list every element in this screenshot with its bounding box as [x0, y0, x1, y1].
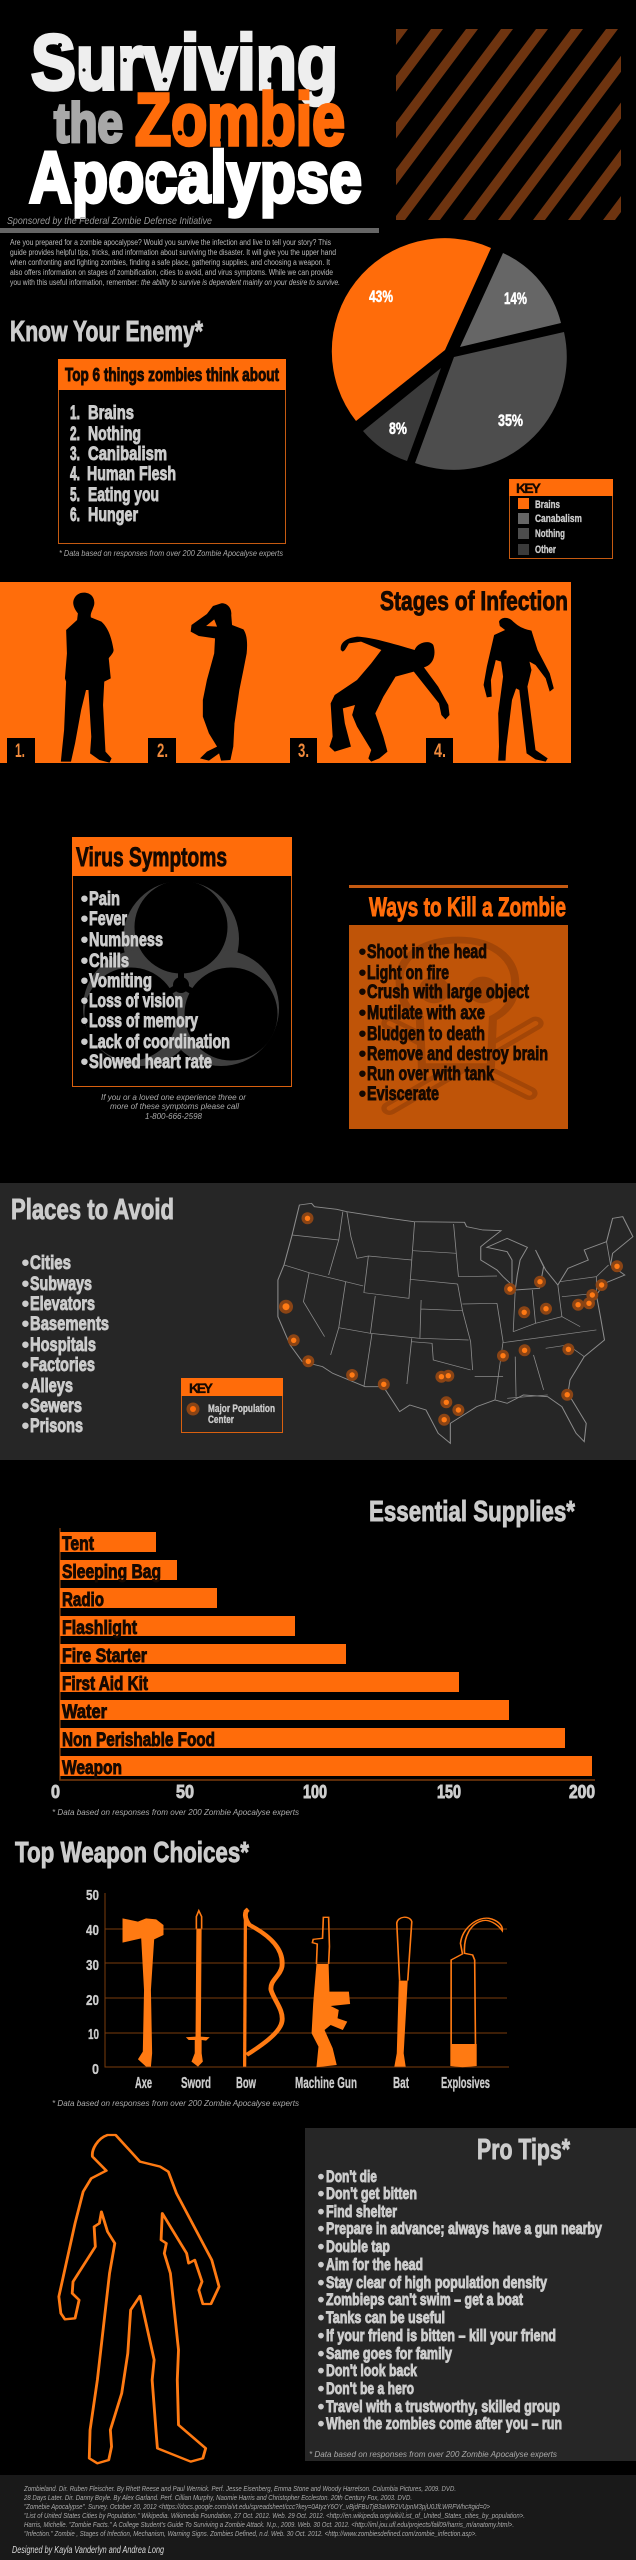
- chart: top weapon choices: 10: [88, 2026, 99, 2043]
- tips list: •: [318, 2237, 324, 2256]
- symptoms call-out note: If you or a loved one experience three or: [101, 1093, 246, 1102]
- map key: Center: [208, 1414, 235, 1426]
- ways list: [359, 941, 548, 1105]
- panel: top 6 things: Human Flesh: [87, 463, 176, 485]
- tips list: Aim for the head: [326, 2255, 423, 2274]
- symptoms list: •: [81, 1010, 88, 1032]
- title: the: [54, 91, 123, 154]
- panel: top 6 things: 5.: [70, 484, 80, 506]
- map key: Major Population: [208, 1403, 275, 1415]
- bar chart: essential supplies: Weapon: [62, 1758, 122, 1779]
- panel: top 6 things: Hunger: [88, 504, 138, 526]
- tips list: •: [318, 2167, 324, 2186]
- ways list: Crush with large object: [367, 981, 529, 1003]
- chart: top weapon choices: Bow: [236, 2075, 256, 2092]
- chart: top weapon choices: Machine Gun: [295, 2075, 357, 2092]
- symptoms list: Vomiting: [89, 970, 152, 992]
- places list: •: [22, 1395, 29, 1417]
- panel: top 6 things: 3.: [70, 443, 80, 465]
- intro text: [9, 238, 340, 287]
- intro text: Are you prepared for a zombie apocalypse? Would you survive the infection and live to tell your story? This: [10, 238, 331, 247]
- footer: references and credits: "Infection." Zombie , Stages of Infection, Mechanism, Warning Signs. Zombies Defined, n.d. Web. 30 Oct. 2012. <http://www.zombiesdefined.com/zombie_infection.asp>.: [24, 2531, 477, 2538]
- ways list: •: [359, 1043, 366, 1065]
- panel: places to avoid: [0, 1183, 636, 1460]
- symptoms list: Slowed heart rate: [89, 1051, 212, 1073]
- symptoms call-out note: more of these symptoms please call: [110, 1102, 239, 1111]
- map key: KEY: [189, 1380, 214, 1396]
- pie key: [509, 479, 613, 558]
- bar chart: essential supplies: 200: [569, 1782, 595, 1802]
- tips list: •: [318, 2326, 324, 2345]
- ways list: •: [359, 962, 366, 984]
- tips list: •: [318, 2184, 324, 2203]
- ways list: •: [359, 1023, 366, 1045]
- pie chart: 35%: [498, 411, 523, 430]
- symptoms list: •: [81, 929, 88, 951]
- bar chart: essential supplies: Tent: [62, 1534, 95, 1555]
- footer: references and credits: "List of United States Cities by Population." Wikipedia. Wikimedia Foundation, 27 Oct. 2012. Web. 29 Oct. 2012. <http://en.wikipedia.org/wiki/List_of_United_States_cities_by_population>.: [24, 2513, 525, 2520]
- heading: places to avoid: Places to Avoid: [11, 1194, 174, 1226]
- grunge specks on title: [58, 43, 348, 193]
- population centre markers: [279, 1212, 623, 1426]
- footer: references and credits: Designed by Kayla Vanderlyn and Andrea Long: [12, 2545, 164, 2556]
- symptoms list: Loss of memory: [89, 1010, 198, 1032]
- stage number 2: [148, 738, 176, 763]
- heading: essential supplies: Essential Supplies*: [369, 1496, 576, 1528]
- symptoms list: Chills: [89, 950, 129, 972]
- bar chart: essential supplies: 100: [303, 1782, 327, 1802]
- chart: top weapon choices: Axe: [135, 2075, 152, 2092]
- tips list: •: [318, 2397, 324, 2416]
- bar chart: essential supplies: 150: [437, 1782, 461, 1802]
- pie chart: 8%: [389, 419, 407, 438]
- panel: top 6 things: 1.: [70, 402, 80, 424]
- heading: pro tips: Pro Tips*: [477, 2134, 571, 2166]
- places list: Sewers: [30, 1395, 82, 1417]
- sponsor line: Sponsored by the Federal Zombie Defense Initiative: [7, 215, 212, 227]
- footnote: * Data based on responses from over 200 Zombie Apocalyse experts: [52, 1808, 299, 1817]
- stage number 3: 3.: [298, 741, 309, 762]
- symptoms list: •: [81, 970, 88, 992]
- panel: virus symptoms: Virus Symptoms: [76, 842, 227, 872]
- tips list: Double tap: [326, 2237, 390, 2256]
- intro text: when confronting and fighting zombies, finding a safe place, gathering supplies, and choosing a weapon. It: [9, 258, 331, 267]
- population centre marker cores: [282, 1216, 620, 1422]
- symptoms call-out note: [101, 1093, 246, 1121]
- footer: references and credits: Zombieland. Dir. Ruben Fleischer. By Rhett Reese and Paul Wernick. Perf. Jesse Eisenberg, Emma Stone and Woody Harrelson. Columbia Pictures, 2009. DVD.: [23, 2486, 456, 2493]
- tips list: •: [318, 2308, 324, 2327]
- tips list: •: [318, 2361, 324, 2380]
- zombie outline figure: [59, 2135, 219, 2463]
- pie chart: 43%: [369, 287, 393, 306]
- pie key: Other: [535, 544, 557, 556]
- tips list: •: [318, 2379, 324, 2398]
- bar chart: essential supplies: [51, 1528, 595, 1802]
- panel: virus symptoms: [72, 837, 292, 1086]
- tips list: •: [318, 2414, 324, 2433]
- tips list: •: [318, 2273, 324, 2292]
- tips list: Tanks can be useful: [326, 2308, 445, 2327]
- map key: [181, 1378, 283, 1432]
- panel: top 6 things: Brains: [88, 402, 134, 424]
- stage number 4: 4.: [434, 741, 446, 762]
- weapon icons: [123, 1909, 502, 2067]
- ways list: Remove and destroy brain: [367, 1043, 548, 1065]
- ways list: Eviscerate: [367, 1083, 439, 1105]
- tips list: Don't get bitten: [326, 2184, 417, 2203]
- chart: top weapon choices: 0: [92, 2061, 99, 2078]
- ways list: •: [359, 941, 366, 963]
- stage number 4: [426, 738, 453, 763]
- stage number 2: 2.: [157, 741, 168, 762]
- tips list: [318, 2167, 602, 2433]
- symptoms list: •: [81, 908, 88, 930]
- places list: Cities: [30, 1252, 71, 1274]
- places list: Factories: [30, 1354, 95, 1376]
- bar chart: essential supplies: Non Perishable Food: [62, 1730, 215, 1751]
- places list: •: [22, 1273, 29, 1295]
- chart: top weapon choices: 50: [86, 1887, 99, 1904]
- places list: Elevators: [30, 1293, 95, 1315]
- places list: Subways: [30, 1273, 92, 1295]
- places list: •: [22, 1313, 29, 1335]
- ways list: Bludgen to death: [367, 1023, 485, 1045]
- tips list: If your friend is bitten – kill your friend: [326, 2326, 556, 2345]
- symptoms list: Lack of coordination: [89, 1031, 230, 1053]
- symptoms list: [81, 888, 230, 1073]
- ways list: Shoot in the head: [367, 941, 487, 963]
- places list: [22, 1252, 109, 1437]
- places list: •: [22, 1415, 29, 1437]
- symptoms list: Pain: [89, 888, 120, 910]
- places list: •: [22, 1375, 29, 1397]
- places list: Prisons: [30, 1415, 83, 1437]
- panel: top 6 things: Nothing: [88, 423, 141, 445]
- pie key: Brains: [535, 499, 560, 511]
- ways list: Run over with tank: [367, 1063, 494, 1085]
- bar chart: essential supplies: First Aid Kit: [62, 1674, 149, 1695]
- symptoms list: •: [81, 1031, 88, 1053]
- pie key: Nothing: [535, 528, 565, 540]
- ways list: Mutilate with axe: [367, 1002, 485, 1024]
- stage number 1: 1.: [15, 741, 25, 762]
- ways list: •: [359, 1083, 366, 1105]
- tips list: Don't be a hero: [326, 2379, 414, 2398]
- title: [29, 18, 362, 218]
- places list: •: [22, 1354, 29, 1376]
- tips list: •: [318, 2219, 324, 2238]
- symptoms list: •: [81, 1051, 88, 1073]
- footer: references and credits: [0, 2475, 636, 2560]
- icon: skull and crossbones: [389, 940, 536, 1108]
- hazard stripes: [396, 29, 621, 220]
- panel: top 6 things: Eating you: [88, 484, 159, 506]
- footer: references and credits: "Zomebie Apocalypse". Survey. October 20, 2012 <https://docs.google.com/a/vt.edu/spreadsheet/ccc?key=0AtyzY6OY_vBjdFBuTjB3aWR2VUpnM3pjU0JfLWRFWhc#gid=0>: [24, 2504, 490, 2511]
- chart: top weapon choices: Bat: [393, 2075, 409, 2092]
- bar chart: essential supplies: Flashlight: [62, 1618, 138, 1639]
- tips list: Same goes for family: [326, 2344, 452, 2363]
- panel: pro tips: [305, 2128, 636, 2461]
- symptoms list: •: [81, 990, 88, 1012]
- US map: [278, 1203, 633, 1443]
- intro text: also offers information on stages of zombification, cities to avoid, and virus symptoms. While we can provide: [10, 268, 333, 277]
- bar chart: essential supplies: 0: [51, 1782, 60, 1802]
- pie chart: 14%: [504, 289, 527, 308]
- tips list: Don't look back: [326, 2361, 417, 2380]
- ways list: •: [359, 1063, 366, 1085]
- places list: •: [22, 1252, 29, 1274]
- silhouettes of the four stages: [61, 593, 554, 763]
- places list: Basements: [30, 1313, 109, 1335]
- symptoms list: Numbness: [89, 929, 163, 951]
- tips list: •: [318, 2202, 324, 2221]
- title: Surviving: [31, 18, 338, 106]
- chart: top weapon choices: 30: [86, 1957, 99, 1974]
- symptoms list: Loss of vision: [89, 990, 183, 1012]
- tips list: Zombieps can't swim – get a boat: [326, 2290, 523, 2309]
- symptoms call-out note: 1-800-666-2598: [145, 1112, 203, 1121]
- heading: top weapon choices: Top Weapon Choices*: [15, 1837, 250, 1869]
- title: Zombie: [135, 78, 345, 161]
- panel: top 6 things: 6.: [70, 504, 80, 526]
- symptoms list: •: [81, 888, 88, 910]
- pie chart: [332, 238, 567, 470]
- footnote: * Data based on responses from over 200 Zombie Apocalyse experts: [59, 549, 283, 558]
- intro text: you with this useful information, remember: the ability to survive is dependent mainly on your desire to survive.: [10, 278, 340, 287]
- panel: ways to kill a zombie: [349, 885, 568, 1129]
- chart: top weapon choices: 40: [86, 1922, 99, 1939]
- footer: references and credits: Harris, Michelle. "Zombie Facts." A College Student's Guide To Surviving a Zombie Attack. N.p., 2009. Web. 30 Oct. 2012. <http://iml.jou.ufl.edu/projects/fall09/harris_m/anatomy.html>.: [24, 2522, 514, 2529]
- places list: •: [22, 1334, 29, 1356]
- intro text: guide provides helpful tips, tricks, and information about surviving the disaster. It will give you the upper hand: [10, 248, 336, 257]
- tips list: Don't die: [326, 2167, 377, 2186]
- panel: top 6 things: Top 6 things zombies think about: [65, 365, 279, 385]
- panel: top 6 things: 4.: [70, 463, 80, 485]
- panel: stages of infection: [0, 582, 571, 763]
- chart: top weapon choices: [86, 1887, 509, 2092]
- tips list: Travel with a trustworthy, skilled group: [326, 2397, 560, 2416]
- bar chart: essential supplies: Sleeping Bag: [62, 1562, 161, 1583]
- chart: top weapon choices: 20: [86, 1992, 99, 2009]
- tips list: Find shelter: [326, 2202, 397, 2221]
- stage number 3: [290, 738, 317, 763]
- pie key: Canabalism: [535, 513, 582, 525]
- footnote: * Data based on responses from over 200 Zombie Apocalyse experts: [52, 2099, 299, 2108]
- tips list: Stay clear of high population density: [326, 2273, 547, 2292]
- title: Apocalypse: [29, 138, 362, 218]
- symptoms list: Fever: [89, 908, 127, 930]
- chart: top weapon choices: Sword: [181, 2075, 211, 2092]
- panel: top 6 things: [58, 359, 286, 544]
- ways list: Light on fire: [367, 962, 449, 984]
- footnote: * Data based on responses from over 200 Zombie Apocalyse experts: [309, 2450, 557, 2459]
- bar chart: essential supplies: Fire Starter: [62, 1646, 148, 1667]
- pie key: KEY: [516, 480, 542, 496]
- ways list: •: [359, 981, 366, 1003]
- bar chart: essential supplies: 50: [176, 1782, 194, 1802]
- places list: Alleys: [30, 1375, 73, 1397]
- symptoms list: •: [81, 950, 88, 972]
- bar chart: essential supplies: Water: [62, 1702, 108, 1723]
- bar chart: essential supplies: Radio: [62, 1590, 104, 1611]
- stage number 1: [7, 738, 35, 763]
- tips list: •: [318, 2290, 324, 2309]
- places list: •: [22, 1293, 29, 1315]
- icon: biohazard: [83, 880, 279, 1066]
- places list: Hospitals: [30, 1334, 96, 1356]
- footer: references and credits: 28 Days Later. Dir. Danny Boyle. By Alex Garland. Perf. Cillian Murphy, Naomie Harris and Christopher Eccleston. 20th Century Fox, 2003. DVD.: [23, 2495, 412, 2502]
- heading: stages of infection: Stages of Infection: [380, 586, 568, 616]
- panel: top 6 things: Canibalism: [88, 443, 167, 465]
- ways list: •: [359, 1002, 366, 1024]
- chart: top weapon choices: Explosives: [441, 2075, 490, 2092]
- heading: know your enemy: Know Your Enemy*: [10, 316, 204, 348]
- tips list: •: [318, 2255, 324, 2274]
- tips list: •: [318, 2344, 324, 2363]
- panel: top 6 things: 2.: [70, 423, 80, 445]
